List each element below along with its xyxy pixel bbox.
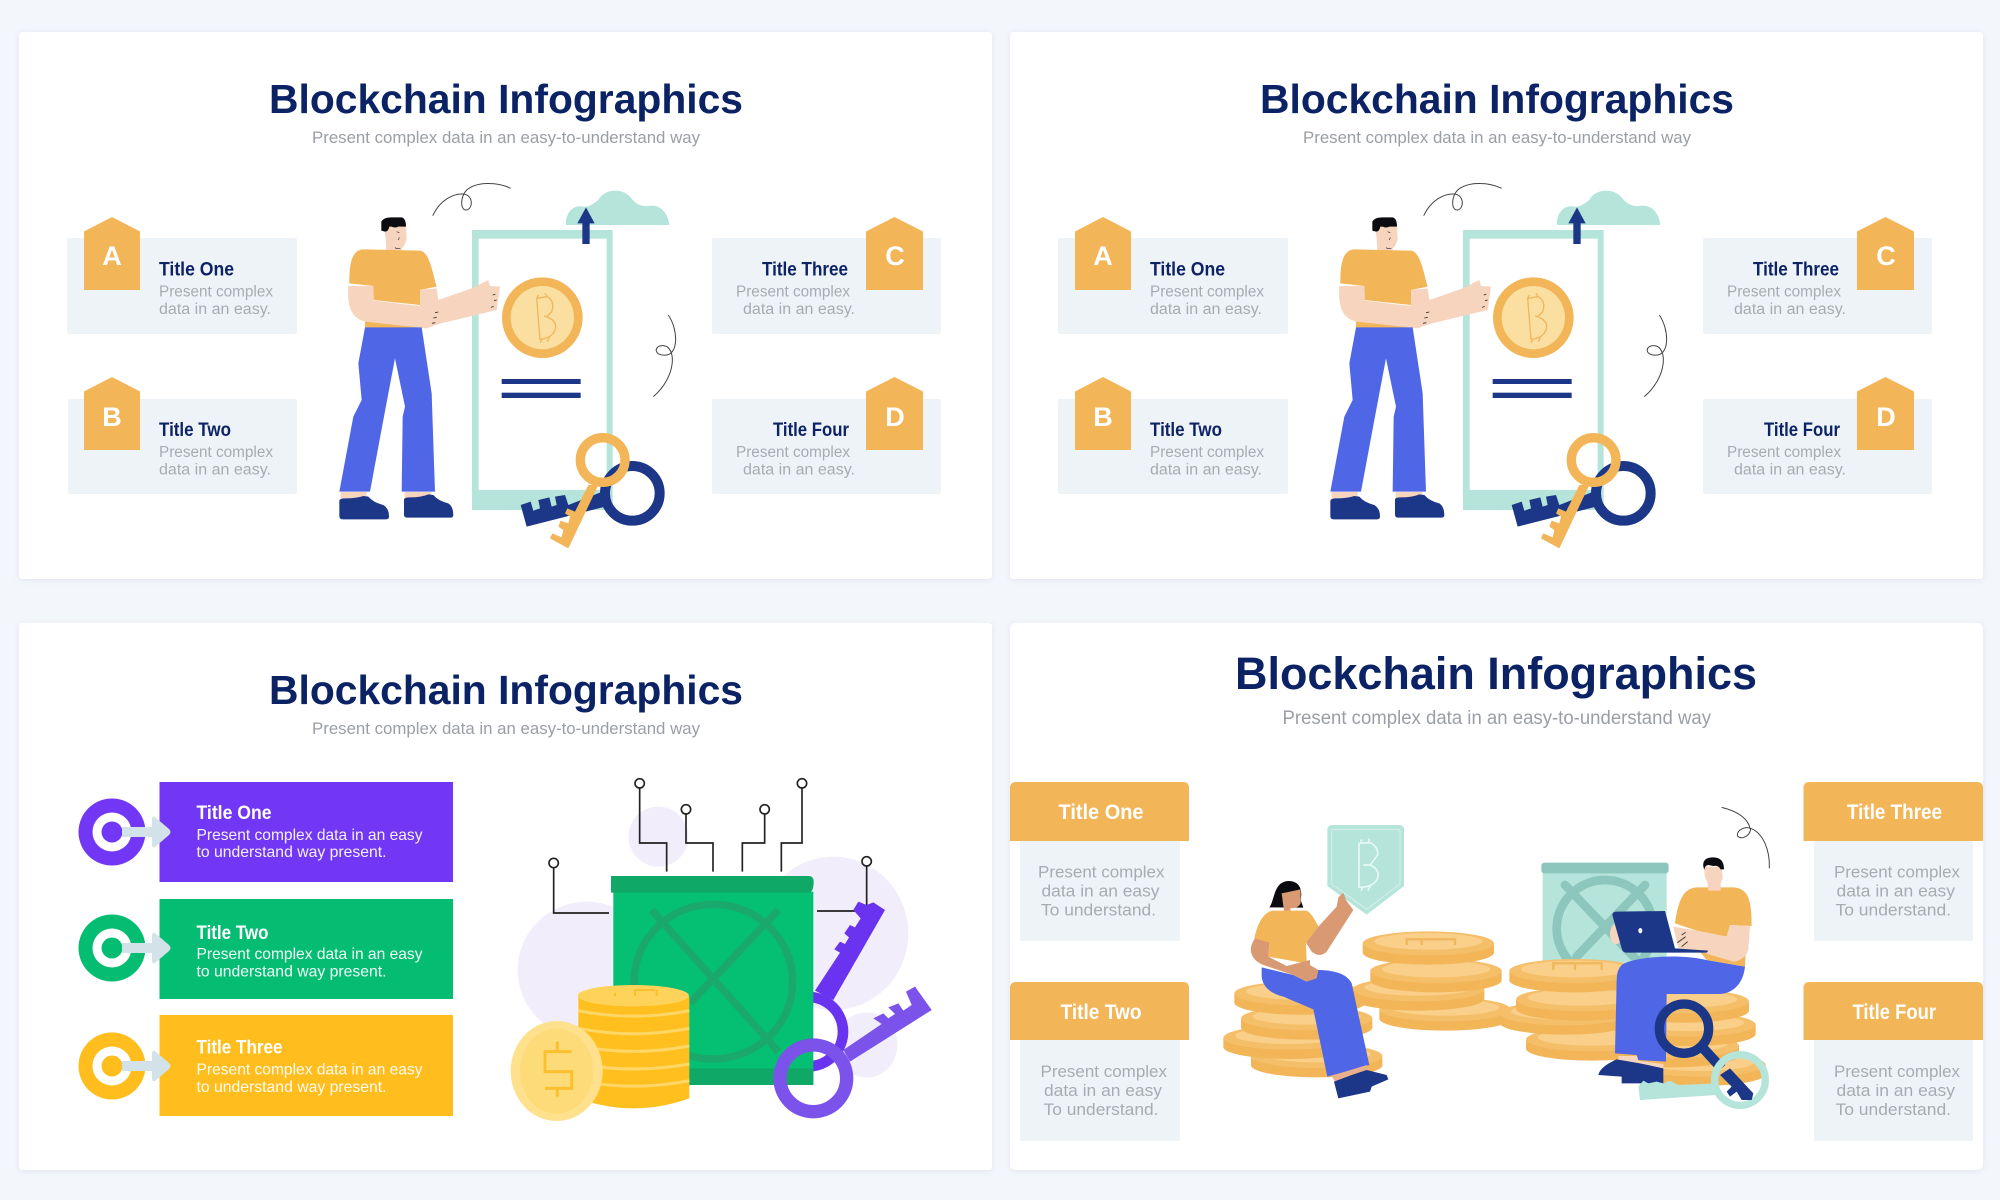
icon: purple target with arrow — [78, 798, 170, 866]
card A: Present complex — [159, 284, 273, 300]
card A — [1058, 217, 1288, 334]
bar: green title two: to understand way present. — [196, 964, 386, 980]
card: title three: Title Three — [1847, 801, 1942, 824]
card D: Present complex — [1727, 444, 1841, 461]
bar: purple title one: Present complex data in an easy — [196, 827, 422, 844]
card B: Present complex — [159, 444, 273, 461]
bar: yellow title three: Present complex data in an easy — [196, 1062, 422, 1078]
card: title one — [1010, 782, 1189, 941]
card B: Title Two — [1150, 420, 1222, 441]
card C — [712, 217, 941, 334]
card A: data in an easy. — [159, 301, 271, 318]
card: title four: To understand. — [1836, 1100, 1951, 1119]
card: title two: To understand. — [1044, 1100, 1158, 1119]
card A: Present complex — [1150, 284, 1264, 300]
panel: bottom right slide — [1010, 623, 1983, 1170]
title: Blockchain Infographics — [269, 667, 743, 713]
illustration: man with laptop, chip, magnifier and key — [1499, 807, 1769, 1105]
card C: data in an easy. — [1734, 301, 1846, 318]
illustration: man with phone, coin and keys — [1330, 184, 1667, 548]
card A: Title One — [159, 260, 234, 280]
card A: A — [102, 241, 122, 271]
card: title four: Present complex — [1834, 1062, 1960, 1081]
card: title two: Present complex — [1040, 1062, 1167, 1081]
card: title two: data in an easy — [1044, 1081, 1163, 1100]
bar: green title two — [160, 899, 453, 999]
card D: D — [1876, 402, 1896, 432]
card: title two: Title Two — [1060, 1001, 1142, 1024]
card: title three: To understand. — [1836, 900, 1951, 920]
bar: yellow title three — [160, 1015, 453, 1116]
panel: bottom left slide — [19, 623, 992, 1170]
card A: Title One — [1150, 260, 1225, 280]
card: title three — [1804, 782, 1983, 941]
illustration: woman on coins with shield — [1223, 825, 1511, 1098]
title: Blockchain Infographics — [1235, 648, 1757, 699]
card A — [67, 217, 297, 334]
card D: Title Four — [773, 420, 850, 441]
bar: green title two: Title Two — [196, 923, 268, 944]
panel: top right slide — [1010, 32, 1983, 579]
card: title one: data in an easy — [1042, 882, 1160, 900]
title: Blockchain Infographics — [269, 76, 743, 122]
bar: yellow title three: to understand way present. — [196, 1079, 386, 1096]
card D — [1703, 377, 1932, 494]
card B: B — [1093, 402, 1113, 432]
card D: data in an easy. — [743, 462, 855, 478]
card B: data in an easy. — [1150, 462, 1262, 478]
card C: C — [1876, 241, 1896, 271]
bar: yellow title three: Title Three — [196, 1038, 282, 1058]
subtitle: Present complex data in an easy-to-understand way — [1303, 128, 1691, 147]
card: title four: Title Four — [1852, 1001, 1936, 1024]
card D: Present complex — [736, 444, 850, 461]
card C: Present complex — [736, 284, 850, 300]
card: title one: To understand. — [1041, 900, 1156, 920]
card D — [712, 377, 941, 494]
card C: Title Three — [762, 260, 848, 280]
bar: purple title one — [160, 782, 453, 882]
card: title two — [1010, 982, 1189, 1141]
panel: top left slide — [19, 32, 992, 579]
card: title one: Title One — [1058, 801, 1144, 824]
card C: data in an easy. — [743, 301, 855, 318]
subtitle: Present complex data in an easy-to-understand way — [312, 719, 700, 738]
card A: data in an easy. — [1150, 301, 1262, 318]
card D: data in an easy. — [1734, 462, 1846, 478]
card B — [68, 377, 297, 494]
card B: B — [102, 402, 122, 432]
card B: Present complex — [1150, 444, 1264, 461]
bar: green title two: Present complex data in an easy — [196, 946, 422, 963]
card C — [1703, 217, 1932, 334]
card B: data in an easy. — [159, 462, 271, 478]
illustration: green chip, coins and purple keys — [511, 779, 932, 1121]
card: title one: Present complex — [1038, 862, 1165, 882]
bar: purple title one: Title One — [196, 803, 272, 824]
card C: C — [885, 241, 905, 271]
card B — [1058, 377, 1288, 494]
icon: yellow target with arrow — [78, 1032, 170, 1100]
card C: Title Three — [1753, 260, 1839, 280]
subtitle: Present complex data in an easy-to-understand way — [312, 128, 700, 147]
card D: D — [885, 402, 905, 432]
card: title three: data in an easy — [1836, 882, 1956, 900]
card C: Present complex — [1727, 284, 1841, 300]
card: title four — [1804, 982, 1983, 1141]
card D: Title Four — [1764, 420, 1841, 441]
card B: Title Two — [159, 420, 231, 441]
title: Blockchain Infographics — [1260, 76, 1734, 122]
bar: purple title one: to understand way present. — [196, 844, 386, 861]
card A: A — [1093, 241, 1113, 271]
card: title three: Present complex — [1834, 862, 1960, 882]
card: title four: data in an easy — [1836, 1081, 1956, 1100]
illustration: man with phone, coin and keys — [339, 184, 676, 548]
icon: green target with arrow — [78, 914, 170, 982]
subtitle: Present complex data in an easy-to-understand way — [1282, 708, 1711, 729]
